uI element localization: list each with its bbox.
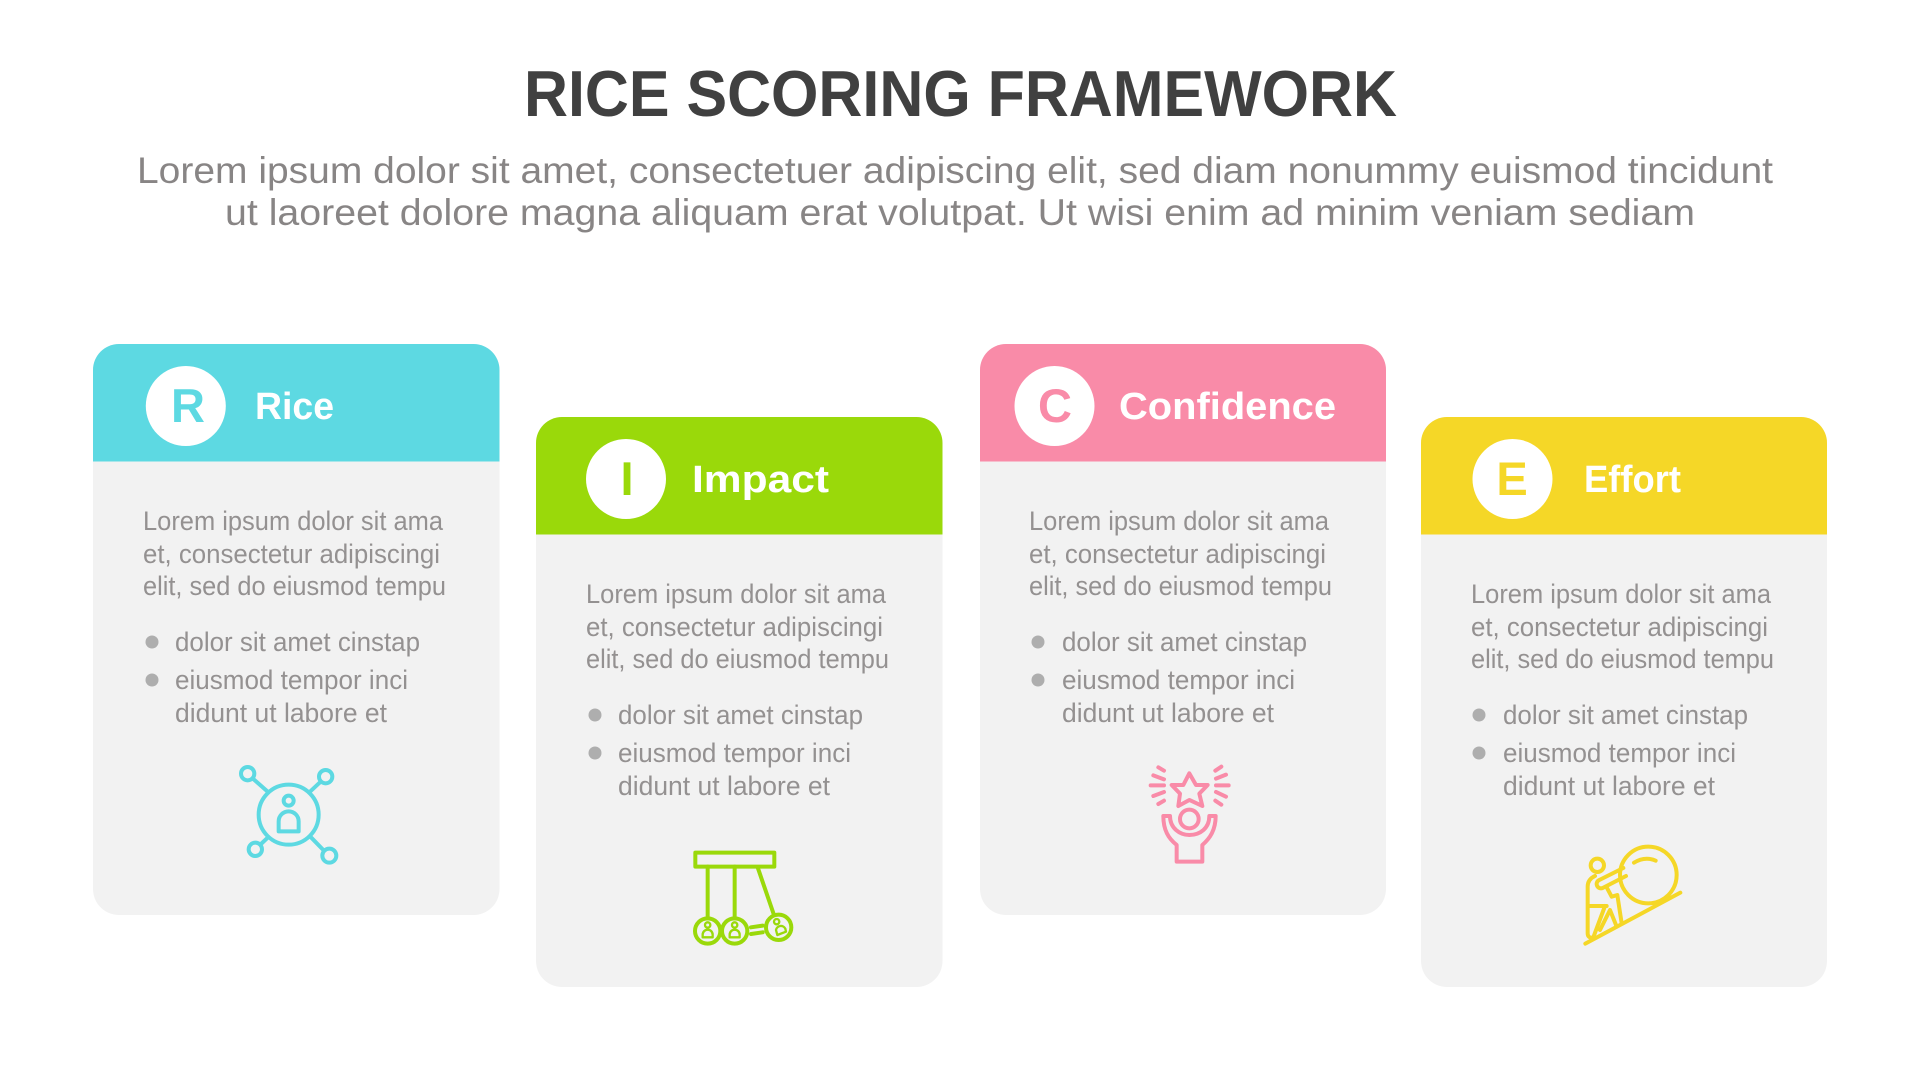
subtitle text block: Lorem ipsum dolor sit amet, consectetuer adipiscing elit, sed diam nonummy euismod tincidunt <box>137 150 1774 191</box>
badge: R: R <box>171 379 205 432</box>
card background <box>1421 417 1827 987</box>
card background <box>536 417 942 987</box>
bullet list: didunt ut labore et <box>618 771 830 801</box>
badge: C <box>1014 366 1094 446</box>
bullet list: dolor sit amet cinstap <box>1503 700 1748 730</box>
bullet list: didunt ut labore et <box>175 698 387 728</box>
bullet list: didunt ut labore et <box>1062 698 1274 728</box>
icon: newton cradle <box>695 853 791 944</box>
bullet list: dolor sit amet cinstap <box>1062 627 1307 657</box>
heading: Effort: Effort <box>1584 459 1681 501</box>
badge: C: C <box>1038 379 1072 432</box>
bullet list: eiusmod tempor inci <box>1503 738 1736 768</box>
description: Lorem ipsum dolor sit ama <box>1471 579 1772 609</box>
badge: I: I <box>620 452 634 505</box>
bullet list: eiusmod tempor inci <box>618 738 851 768</box>
card background <box>980 344 1386 915</box>
description: elit, sed do eiusmod tempu <box>143 571 446 601</box>
icon: person network <box>241 767 336 863</box>
icon: person pushing boulder <box>1585 847 1680 944</box>
panel: Rice <box>93 344 500 915</box>
panel: Impact <box>536 417 942 987</box>
badge: E: E <box>1496 452 1528 505</box>
bullet list <box>1472 700 1748 801</box>
bullet list: didunt ut labore et <box>1503 771 1715 801</box>
card background <box>93 344 500 915</box>
bullet list: eiusmod tempor inci <box>175 665 408 695</box>
description <box>143 506 446 601</box>
badge: I <box>586 439 666 519</box>
badge: R <box>146 366 226 446</box>
description: et, consectetur adipiscingi <box>1029 539 1326 569</box>
heading: Rice: Rice <box>255 386 334 428</box>
header band <box>1421 417 1827 534</box>
subtitle text block: ut laoreet dolore magna aliquam erat volutpat. Ut wisi enim ad minim veniam sediam <box>225 192 1695 233</box>
description: et, consectetur adipiscingi <box>1471 612 1768 642</box>
description: Lorem ipsum dolor sit ama <box>143 506 444 536</box>
header band <box>93 344 500 462</box>
description: Lorem ipsum dolor sit ama <box>1029 506 1330 536</box>
header band <box>536 417 942 534</box>
description <box>1471 579 1774 674</box>
description: elit, sed do eiusmod tempu <box>586 644 889 674</box>
heading: Impact: Impact <box>692 459 829 501</box>
bullet list: dolor sit amet cinstap <box>618 700 863 730</box>
panel: Confidence <box>980 344 1386 915</box>
bullet list <box>588 700 863 801</box>
bullet list <box>146 627 420 728</box>
bullet list: dolor sit amet cinstap <box>175 627 420 657</box>
heading: Confidence: Confidence <box>1119 386 1336 428</box>
title: RICE SCORING FRAMEWORK <box>524 57 1397 130</box>
description: et, consectetur adipiscingi <box>586 612 883 642</box>
badge: E <box>1472 439 1552 519</box>
description <box>586 579 889 674</box>
description: elit, sed do eiusmod tempu <box>1471 644 1774 674</box>
description: Lorem ipsum dolor sit ama <box>586 579 887 609</box>
icon: person reaching star <box>1151 767 1229 862</box>
bullet list: eiusmod tempor inci <box>1062 665 1295 695</box>
description: et, consectetur adipiscingi <box>143 539 440 569</box>
description <box>1029 506 1332 601</box>
description: elit, sed do eiusmod tempu <box>1029 571 1332 601</box>
bullet list <box>1032 627 1307 728</box>
subtitle text block <box>137 150 1774 233</box>
panel: Effort <box>1421 417 1827 987</box>
header band <box>980 344 1386 462</box>
